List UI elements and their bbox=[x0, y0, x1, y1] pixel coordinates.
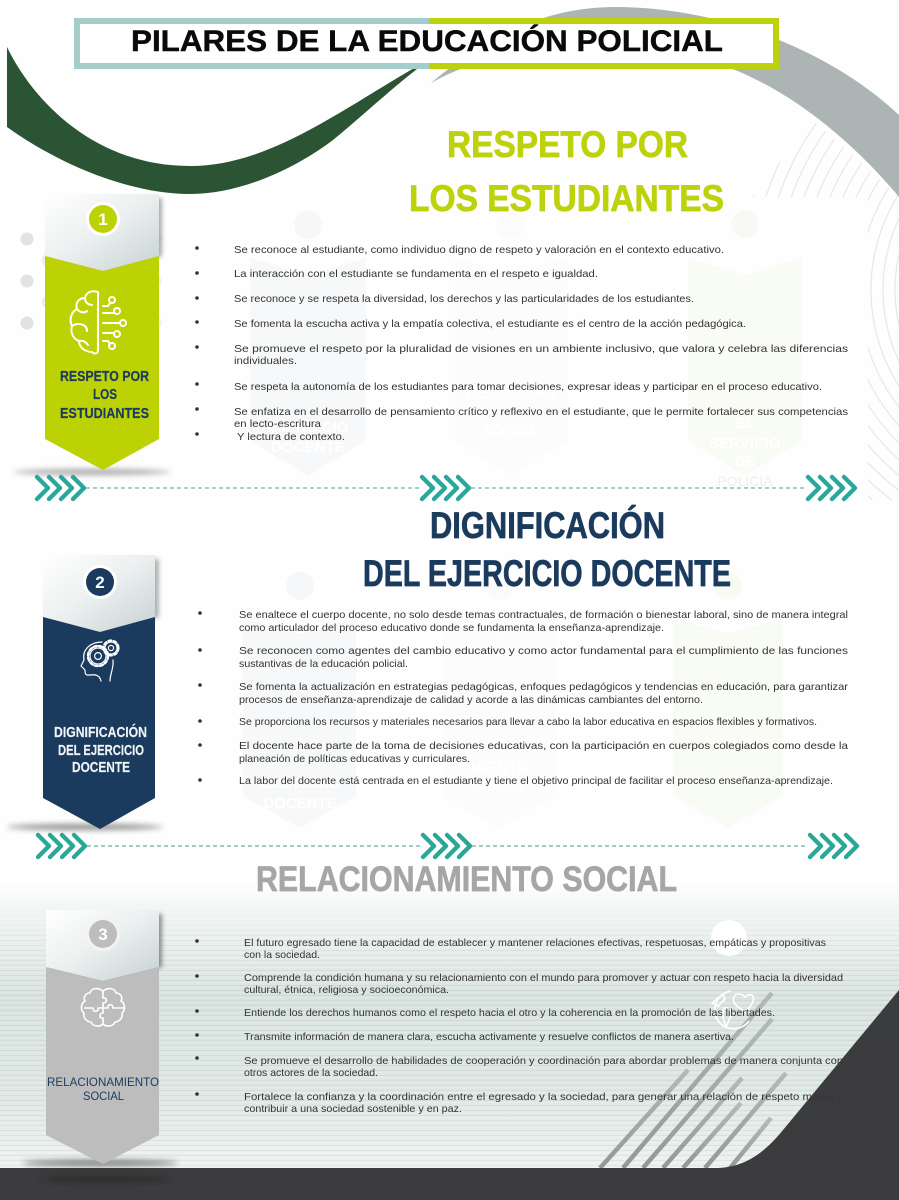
ribbon 2 shadow bbox=[7, 824, 163, 830]
text: dignificación bullets: Se reconocen como agentes del cambio educativo y como actor fundamental para el cumplimiento de las funciones bbox=[239, 646, 848, 657]
text: respeto bullets: Se promueve el respeto por la pluralidad de visiones en un ambiente inclusivo, que valora y celebra las diferencias bbox=[234, 344, 848, 355]
text: respeto bullets: en lecto-escritura bbox=[234, 419, 321, 430]
text: dignificación bullets: sustantivas de la educación policial. bbox=[239, 659, 408, 670]
text: dignificación bullets: procesos de enseñanza-aprendizaje de calidad y acorde a las dinámicas cambiantes del entorno. bbox=[239, 695, 703, 706]
heading: dignificación bbox=[363, 504, 731, 594]
number badge 1: 1 bbox=[98, 210, 108, 229]
icon: white circle ghost bbox=[711, 920, 747, 956]
text: dignificación bullets: Se enaltece el cuerpo docente, no solo desde temas contractuales, de formación o bienestar laboral, sino de manera integral bbox=[239, 610, 848, 621]
ribbon label: DIGNIFICACIÓN bbox=[54, 723, 147, 741]
text: relacionamiento bullets: Transmite información de manera clara, escucha activamente y resuelve conflictos de manera asertiva. bbox=[244, 1032, 734, 1043]
heading: respeto: LOS ESTUDIANTES bbox=[409, 178, 724, 219]
number badge 2 bbox=[83, 565, 117, 599]
text: relacionamiento bullets: con la sociedad. bbox=[244, 950, 320, 961]
icon: globe with heart bbox=[712, 991, 754, 1029]
icon: puzzle brain bbox=[81, 989, 125, 1026]
ribbon label: ESTUDIANTES bbox=[60, 406, 149, 422]
ribbon label: RELACIONAMIENTO bbox=[47, 1077, 159, 1089]
text: relacionamiento bullets: cultural, étnica, religiosa y socioeconómica. bbox=[244, 985, 449, 996]
ribbon 3 shadow bbox=[22, 1160, 178, 1182]
ghost ribbons, first row: DOCENTE bbox=[271, 439, 345, 456]
icon: head with gears bbox=[81, 640, 118, 681]
text: respeto bullets: Se enfatiza en el desarrollo de pensamiento crítico y reflexivo en el estudiante, que le permite fortalecer sus competencias bbox=[234, 407, 848, 418]
icon: brain circuit bbox=[71, 291, 126, 353]
heading: dignificación: DIGNIFICACIÓN bbox=[430, 504, 665, 546]
heading: respeto bbox=[409, 124, 724, 219]
ghost ribbons, first row: POLICIA bbox=[717, 473, 773, 489]
text: respeto bullets: La interacción con el estudiante se fundamenta en el respeto e igualdad. bbox=[234, 269, 598, 280]
ribbon 3: relacionamiento social bbox=[46, 910, 162, 1164]
text: respeto bullets: Se respeta la autonomía de los estudiantes para tomar decisiones, expresar ideas y participar en el proceso educativo. bbox=[234, 382, 822, 393]
gray swoosh bbox=[431, 7, 899, 197]
text: dignificación bullets: La labor del docente está centrada en el estudiante y tiene el objetivo principal de facilitar el proceso enseñanza-aprendizaje. bbox=[239, 776, 833, 787]
number badge 3 bbox=[86, 917, 120, 951]
decorative dots bbox=[20, 232, 162, 330]
ribbon label: RESPETO POR bbox=[60, 369, 149, 385]
heading: respeto: RESPETO POR bbox=[447, 124, 688, 165]
text: relacionamiento bullets bbox=[195, 938, 844, 1115]
ribbon 2: dignificación del ejercicio docente bbox=[43, 555, 159, 829]
diagonal stripes bbox=[600, 993, 786, 1168]
text: relacionamiento bullets: contribuir a una sociedad sostenible y en paz. bbox=[244, 1104, 462, 1115]
ghost ribbons, first row: DE bbox=[735, 453, 755, 470]
ribbon label bbox=[60, 369, 149, 422]
ghost ribbons, second row: DOCENTE bbox=[263, 795, 337, 812]
dark corner and bottom band bbox=[0, 990, 899, 1200]
text: relacionamiento bullets: Se promueve el desarrollo de habilidades de cooperación y coordinación para abordar problemas de manera conjunta con bbox=[244, 1056, 843, 1067]
ribbon label bbox=[47, 1077, 159, 1103]
text: relacionamiento bullets: Comprende la condición humana y su relacionamiento con el mundo para promover y actuar con respeto hacia la diversidad bbox=[244, 973, 843, 984]
text: respeto bullets: Y lectura de contexto. bbox=[237, 432, 345, 443]
ghost ribbons, first row: SOCIAL bbox=[483, 422, 539, 439]
heading: relacionamiento: RELACIONAMIENTO SOCIAL bbox=[256, 860, 677, 899]
text: dignificación bullets: planeación de políticas educativas y curriculares. bbox=[239, 754, 470, 765]
text: respeto bullets: Se reconoce al estudiante, como individuo digno de respeto y valoración en el contexto educativo. bbox=[234, 245, 724, 256]
number badge 1 bbox=[86, 202, 120, 236]
text: relacionamiento bullets: El futuro egresado tiene la capacidad de establecer y mantener relaciones efectivas, respetuosas, empáticas y propositivas bbox=[244, 938, 826, 949]
text: relacionamiento bullets: Entiende los derechos humanos como el respeto hacia el otro y la coherencia en la promoción de las libertades. bbox=[244, 1008, 775, 1019]
ghost ribbons, second row: EJERCICIO bbox=[260, 775, 341, 792]
text: dignificación bullets: El docente hace parte de la toma de decisiones educativas, con la participación en cuerpos colegiados como desde la bbox=[239, 741, 848, 752]
text: respeto bullets: individuales. bbox=[234, 356, 297, 367]
number badge 2: 2 bbox=[95, 573, 105, 592]
ribbon 1: respeto por los estudiantes bbox=[45, 194, 162, 470]
text: dignificación bullets: Se fomenta la actualización en estrategias pedagógicas, enfoques pedagógicos y tendencias en educación, para garantizar bbox=[239, 682, 849, 693]
text: relacionamiento bullets: otros actores de la sociedad. bbox=[244, 1068, 378, 1079]
title banner bbox=[74, 18, 779, 69]
text: respeto bullets bbox=[195, 245, 848, 443]
arrow row 1 bbox=[37, 477, 855, 499]
text: dignificación bullets bbox=[198, 610, 849, 787]
ribbon label: DEL EJERCICIO bbox=[58, 743, 144, 759]
number badge 3: 3 bbox=[98, 925, 108, 944]
ghost ribbons, second row: SOCIAL bbox=[472, 777, 528, 794]
text: dignificación bullets: como articulador del proceso educativo donde se fundamenta la enseñanza-aprendizaje. bbox=[239, 623, 664, 634]
ghost ribbons, second row bbox=[243, 572, 783, 828]
text: relacionamiento bullets: Fortalece la confianza y la coordinación entre el egresado y la sociedad, para generar una relación de respeto mutuo y bbox=[244, 1092, 844, 1103]
ribbon label: SOCIAL bbox=[83, 1091, 125, 1103]
bottom gradient band bbox=[0, 880, 899, 1170]
heading: dignificación: DEL EJERCICIO DOCENTE bbox=[363, 553, 731, 594]
ribbon 1 shadow bbox=[14, 469, 170, 475]
ribbon label: LOS bbox=[93, 387, 117, 403]
arrow row 2 bbox=[38, 835, 857, 857]
text: dignificación bullets: Se proporciona los recursos y materiales necesarios para llevar a cabo la labor educativa en espacios flexibles y formativos. bbox=[239, 717, 817, 728]
ghost ribbons, first row: EL bbox=[735, 415, 755, 432]
ghost ribbons, first row: SERVICIO bbox=[709, 435, 781, 452]
text: respeto bullets: Se fomenta la escucha activa y la empatía colectiva, el estudiante es el centro de la acción pedagógica. bbox=[234, 319, 746, 330]
ribbon label bbox=[54, 723, 147, 776]
text: respeto bullets: Se reconoce y se respeta la diversidad, los derechos y las particularidades de los estudiantes. bbox=[234, 294, 694, 305]
ribbon label: DOCENTE bbox=[72, 760, 130, 776]
ghost ribbons, first row bbox=[250, 210, 802, 489]
decorative concentric arcs bbox=[752, 123, 899, 500]
ghost ribbons, first row: EJERCICIO bbox=[268, 419, 349, 436]
ghost ribbons, first row: RELACIONA bbox=[466, 385, 556, 402]
green swoosh bbox=[7, 47, 428, 194]
ghost ribbons, second row: MIENTO bbox=[471, 759, 529, 776]
title banner: PILARES DE LA EDUCACIÓN POLICIAL bbox=[131, 24, 723, 58]
